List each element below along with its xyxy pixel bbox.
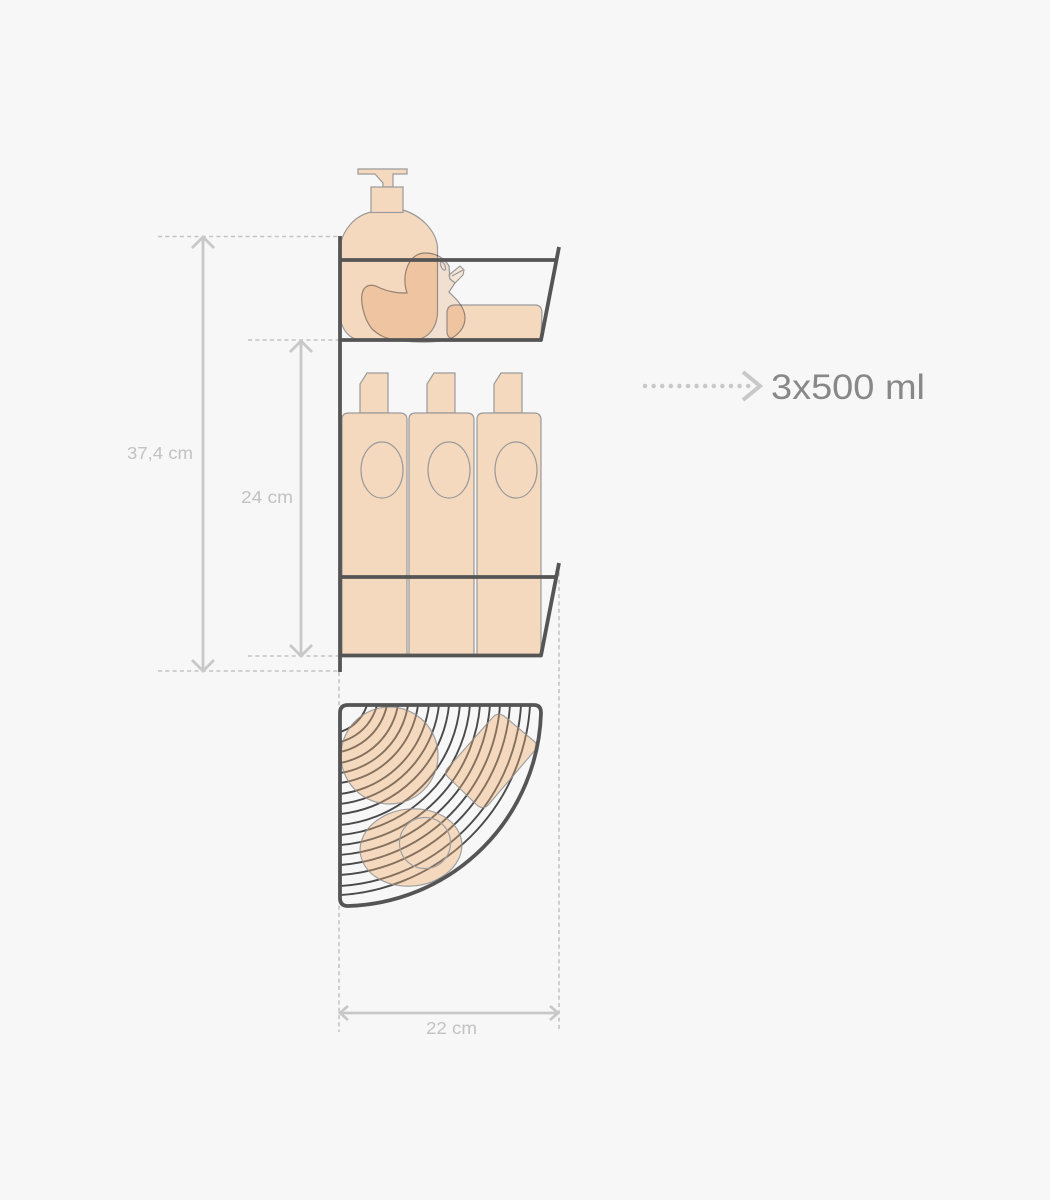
icon: three shampoo bottles bbox=[342, 373, 541, 655]
basket top view bbox=[338, 703, 543, 908]
bottle 2 bbox=[409, 373, 474, 655]
bottle 3 bbox=[477, 373, 541, 655]
upper basket bbox=[340, 247, 559, 340]
icon: rubber duck bbox=[362, 253, 465, 342]
icon: round ball soap bbox=[341, 707, 438, 804]
dotted arrow bbox=[645, 372, 760, 400]
icon: oval sponge bbox=[356, 804, 466, 891]
top shelf contents bbox=[340, 169, 542, 342]
bottle 1 bbox=[342, 373, 407, 655]
dimension: total height 37,4 cm bbox=[127, 237, 214, 671]
dimension guide lines bbox=[158, 236, 559, 1032]
basket outline bbox=[340, 705, 541, 906]
shelf frame side view bbox=[340, 236, 559, 672]
dimension: width 22 cm: 22 cm bbox=[426, 1018, 477, 1038]
dimension: shelf height 24 cm: 24 cm bbox=[241, 487, 293, 507]
icon: soap pump bottle bbox=[340, 169, 438, 340]
back wall rail bbox=[338, 236, 342, 672]
icon: soap bar bbox=[447, 305, 542, 339]
capacity label: 3x500 ml bbox=[771, 368, 925, 407]
sponge inner ring bbox=[400, 818, 450, 868]
items in basket bbox=[341, 707, 537, 891]
lower basket bbox=[340, 563, 559, 656]
icon: rectangular soap bbox=[446, 714, 537, 808]
wires seen through items bbox=[342, 707, 527, 885]
dimension: shelf height 24 cm bbox=[241, 341, 312, 656]
dimension: total height 37,4 cm: 37,4 cm bbox=[127, 443, 193, 463]
dimension: width 22 cm bbox=[340, 1006, 558, 1038]
wire arcs bbox=[342, 706, 531, 896]
infographic: corner shelf dimensions bbox=[128, 168, 922, 1034]
